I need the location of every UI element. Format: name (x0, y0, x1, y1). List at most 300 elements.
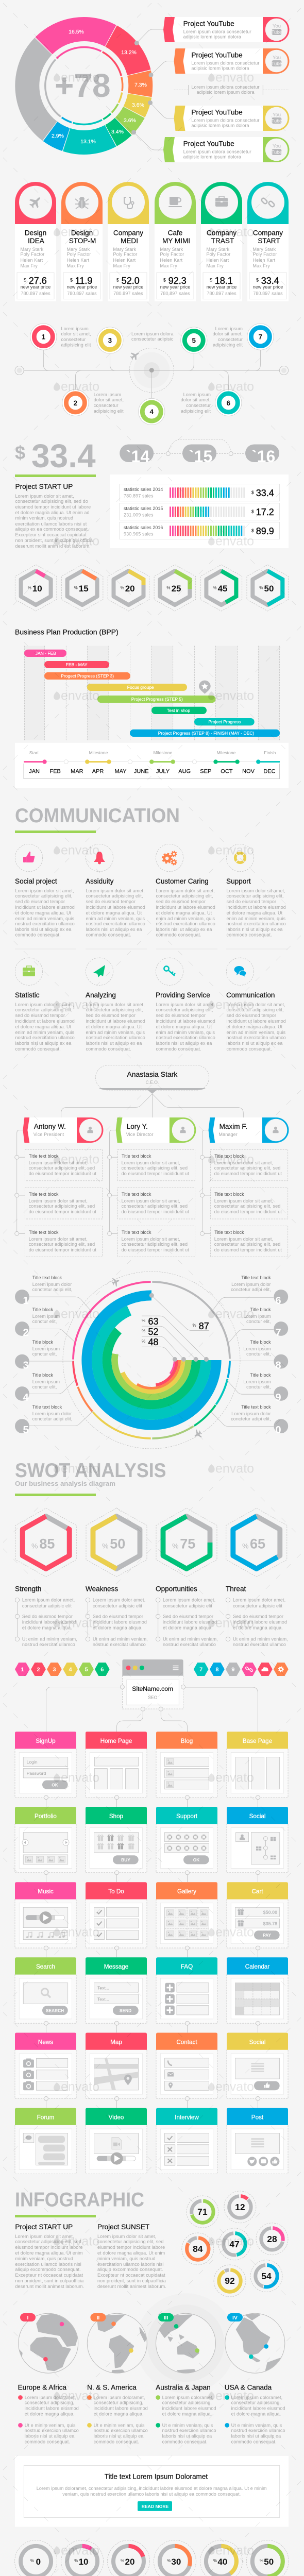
panel: To Do (86, 1882, 147, 1957)
feature: Statistic: consectetur adipisicing elit, (15, 1007, 73, 1012)
swot: Opportunities: et dolore magna aliqua. (163, 1625, 213, 1631)
globes row: IV (232, 2315, 238, 2321)
panel: months timeline: JAN (29, 768, 40, 774)
panel: Social (likes) (227, 2033, 288, 2108)
percent rings: % (121, 2558, 124, 2563)
panel: Music: Music (38, 1888, 54, 1895)
panel: months timeline: APR (92, 768, 104, 774)
region: Australia & Japan: et dolore magna aliqua. (162, 2412, 212, 2417)
feature: Providing Service: Providing Service (156, 991, 210, 999)
feature: Support: consectetur adipisicing elit, (227, 893, 284, 899)
feature: Statistic: Lorem ipsum dolor sit amet, (15, 1002, 74, 1007)
donut chart: +78 (55, 67, 111, 104)
radial bar chart (15, 1250, 288, 1470)
timeline with numbered nodes: Lorem ipsum (94, 392, 121, 397)
region: N. & S. America: et dolore magna aliqua. (94, 2412, 144, 2417)
panel: News (15, 2033, 76, 2108)
card: Project YouTube 1: Project YouTube (183, 20, 234, 28)
swot: Weakness: et dolore magna aliqua. (93, 1625, 143, 1631)
numbered hexagon badges: 3 (53, 1667, 56, 1673)
feature: Communication: Lorem ipsum dolor sit amet, (227, 1002, 285, 1007)
org column: Lory Y.: Lorem ipsum dolor sit amet, (122, 1198, 180, 1204)
price card: Design IDEA: $ (24, 277, 26, 282)
feature: Providing Service: et dolore magna aliqua. Ut (156, 1024, 212, 1029)
feature: Customer Caring: commodo consequat. (156, 933, 201, 938)
radial bar chart: Lorem ipsum (243, 1379, 271, 1384)
card: Project YouTube 3: You (273, 112, 281, 117)
small gauge cluster (182, 2191, 288, 2297)
feature: Social project: laboris nisi ut aliquip ex ea (15, 927, 72, 932)
price card: Design STOP-M: new year price (67, 284, 97, 290)
feature: Providing Service: commodo consequat. (156, 1046, 201, 1052)
radial bar chart: 2 (23, 1327, 29, 1338)
price card: Cafe MY MIMI (155, 182, 196, 301)
price card: Design STOP-M: STOP-M (69, 237, 96, 245)
gantt chart: Project Progress (STEP 8) - FINISH (MAY - DEC) (158, 731, 254, 736)
feature: Assiduity (86, 844, 147, 949)
feature: Assiduity: sed do eiusmod tempor (86, 899, 136, 904)
panel: FAQ (156, 1957, 217, 2032)
percent rings: 50 (264, 2557, 274, 2567)
radial bar chart: Title block (250, 1340, 271, 1345)
feature: Statistic: incididunt ut labore eiusmod (15, 1019, 75, 1024)
feature: Providing Service: incididunt ut labore eiusmod (156, 1019, 215, 1024)
region: Europe & Africa: Lorem ipsum doloramet, (25, 2395, 76, 2400)
panel: Cart: Cart (251, 1888, 263, 1895)
text: Project START UP: minim veniam, quis nostrud (15, 516, 73, 521)
org chart: CEO node (61, 1065, 243, 1117)
org column: Lory Y.: Title text block (122, 1192, 151, 1197)
radial bar chart: % (142, 1329, 145, 1333)
swot: Strength: Ut enim ad minim veniam, (22, 1636, 77, 1641)
feature: Analyzing: sed do eiusmod tempor (86, 1013, 136, 1018)
region: N. & S. America: Lorem ipsum doloramet, (94, 2395, 145, 2400)
region: USA & Canada: commodo consequat. (231, 2439, 277, 2445)
radial bar chart: Lorem ipsum dolor (32, 1411, 72, 1416)
big price heading: $ (15, 442, 25, 463)
price card: Company TRAST: new year price (207, 284, 237, 290)
card: Project YouTube 2: Lorem ipsum dolora consectetur (191, 61, 260, 66)
numbered hexagon badges: 7 (199, 1667, 202, 1673)
year pills: `15 (189, 447, 212, 466)
org column: Lory Y.: consectetur adipisicing elit, sed (122, 1204, 188, 1209)
panel: Forum: Forum (37, 2114, 54, 2121)
feature: Statistic (15, 958, 75, 1052)
year pills: `14 (126, 447, 149, 466)
text: Project START UP and Project SUNSET: non proident, sunt in culpaofficia (97, 2278, 166, 2283)
hexagon percent row: 20 (125, 584, 135, 594)
small gauge cluster: 84 (193, 2244, 203, 2254)
org column: Antony W.: Lorem ipsum dolor sit amet, (29, 1236, 88, 1242)
percent rings (15, 2540, 289, 2576)
feature: Assiduity: commodo consequat. (86, 933, 131, 938)
card: Project YouTube 2: adipisic lorem ipsum dolora (191, 66, 249, 71)
panel: Interview (156, 2108, 217, 2174)
panel: months timeline: FEB (49, 768, 61, 774)
hexagon percent row: 10 (32, 584, 42, 594)
org column: Maxim F.: Title text block (214, 1230, 244, 1235)
panel: Search: Search (36, 1963, 55, 1970)
percent rings: 20 (125, 2557, 134, 2567)
globes row: II (96, 2315, 99, 2321)
org column: Antony W. (15, 1117, 104, 1257)
card: Project YouTube 4: You (273, 143, 281, 149)
panel: Home Page (86, 1732, 147, 1807)
panel: Post: Post (251, 2114, 264, 2121)
panel: months timeline: MAY (114, 768, 127, 774)
panel: months timeline: Milestone (217, 750, 236, 755)
region: USA & Canada: incididunt labore eiusmod (231, 2406, 285, 2411)
panel: sales statistics: 930.965 sales (124, 532, 154, 537)
region: Australia & Japan: Lorem ipsum doloramet, (162, 2395, 213, 2400)
panel: Social (227, 1807, 288, 1882)
panel: SignUp: Password (27, 1771, 46, 1776)
price card: Design IDEA: Helen Kart (21, 258, 43, 263)
price card: Design IDEA: new year price (21, 284, 50, 290)
region: Australia & Japan: laboris nisi ut aliquip ea (162, 2434, 212, 2439)
timeline with numbered nodes: 1 (42, 333, 46, 341)
card: Project YouTube 3: adipisic lorem ipsum dolora (191, 123, 249, 128)
panel: SignUp (15, 1732, 76, 1807)
price card: Cafe MY MIMI: new year price (160, 284, 190, 290)
text: Project START UP and Project SUNSET: Excepteur nt occaecat cupidatat (15, 2273, 83, 2278)
org column: Lory Y. (108, 1117, 196, 1257)
panel: Portfolio: Portfolio (35, 1813, 57, 1820)
org column: Lory Y.: Title text block (122, 1154, 151, 1159)
text: Project START UP and Project SUNSET: exercitation ullamco laboris nisi (97, 2262, 164, 2267)
price card: Cafe MY MIMI: MY MIMI (162, 237, 190, 245)
timeline with numbered nodes: 3 (108, 337, 112, 344)
swot: Weakness: Weakness (86, 1585, 118, 1592)
price card: Company TRAST: Helen Kart (206, 258, 229, 263)
site map root: SiteName.com (46, 1659, 258, 1732)
feature: Social project: Lorem ipsum dolor sit amet, (15, 888, 74, 893)
org column: Lory Y.: Lory Y. (127, 1123, 148, 1130)
timeline with numbered nodes: Lorem ipsum dolora (131, 331, 174, 336)
feature: Assiduity: enim ad minim veniam, quis (86, 916, 145, 921)
timeline with numbered nodes: 7 (259, 333, 262, 341)
feature: Assiduity: Assiduity (86, 877, 114, 885)
numbered hexagon badges: 8 (215, 1667, 218, 1673)
feature: Providing Service: laboris nisi ut aliquip ex ea (156, 1041, 212, 1046)
panel: call to action: veniam, quis nostrud exerciion ullamco laboris nisi ut aliquip ea commodo consequat. (62, 2492, 241, 2497)
timeline with numbered nodes: consectetur (94, 403, 119, 408)
percent rings: % (167, 2558, 171, 2563)
numbered hexagon badges: 2 (37, 1667, 40, 1673)
note text between cards (174, 84, 289, 95)
radial bar chart: conctetur adipi elit, (231, 1287, 271, 1292)
panel: Contact: Contact (176, 2039, 197, 2045)
hexagon percent row: % (259, 585, 263, 590)
feature: Assiduity: laboris nisi ut aliquip ex ea (86, 927, 142, 932)
price card: Company TRAST: Max Fry (206, 263, 224, 268)
price card: Company TRAST: Poly Factor (206, 252, 230, 257)
region: N. & S. America (87, 2384, 148, 2445)
text: Project START UP: consectetur adipisicing elit, sed do (15, 499, 88, 504)
swot: Weakness: Sed do eiusmod tempor (93, 1614, 143, 1619)
panel: SignUp: SignUp (36, 1738, 56, 1744)
price card: Design IDEA: 27.6 (29, 276, 47, 286)
feature: Customer Caring: Customer Caring (156, 877, 209, 885)
region: Europe & Africa: Ut e minim veniam, quis (25, 2422, 76, 2428)
org column: Maxim F.: Lorem ipsum dolor sit amet, (214, 1236, 273, 1242)
price card: Company MEDI: MEDI (121, 237, 138, 245)
gantt chart (24, 646, 280, 740)
gantt chart: Project Progress (STEP 5) (131, 697, 183, 702)
text: Project START UP: Excepteur sint occaecat cupidatat (15, 532, 87, 537)
text: Project START UP: deserunt mollit anim id est laborum. (15, 544, 91, 549)
small gauge cluster: 28 (267, 2234, 277, 2244)
text: Project START UP and Project SUNSET: Excepteur nt occaecat cupidatat (97, 2273, 165, 2278)
price card: Cafe MY MIMI: $ (163, 277, 166, 282)
price card: Company MEDI: Company (113, 229, 143, 237)
price card: Company MEDI: $ (116, 277, 119, 282)
price card: Company MEDI: 52.0 (122, 276, 140, 286)
timeline with numbered nodes: dolor sit amet, (181, 397, 211, 402)
feature: Customer Caring: sed do eiusmod tempor (156, 899, 206, 904)
feature: Statistic: nostrud exercitation ullamco (15, 1035, 75, 1040)
panel: sales statistics: $ (251, 490, 254, 495)
feature: Social project: incididunt ut labore eiusmod (15, 905, 75, 910)
text: Project START UP and Project SUNSET: non proident, sunt in culpaofficia (15, 2278, 83, 2283)
price card: Design IDEA: 780.897 sales (21, 291, 50, 296)
feature: Statistic: laboris nisi ut aliquip ex ea (15, 1041, 72, 1046)
percent rings: % (213, 2558, 217, 2563)
price card: Design IDEA: Poly Factor (21, 252, 44, 257)
panel: sales statistics (110, 474, 289, 548)
note text between cards: adipisic lorem ipsum dolora (196, 90, 255, 95)
swot: Threat: Threat (226, 1585, 246, 1592)
card: Project YouTube 3: Lorem ipsum dolora consectetur (191, 117, 260, 123)
timeline with numbered nodes: consectetur (61, 337, 86, 342)
swot: Strength: % (31, 1542, 38, 1550)
swot: Opportunities: nostrud exercitat ullamco (163, 1642, 216, 1647)
feature: Providing Service: consectetur adipisicing elit, (156, 1007, 213, 1012)
feature: Social project: sed do eiusmod tempor (15, 899, 65, 904)
panel: months timeline: NOV (242, 768, 255, 774)
price card: Company MEDI (108, 182, 149, 301)
price card: Company START: Max Fry (252, 263, 270, 268)
panel: sales statistics: 231.009 sales (124, 513, 154, 518)
panel: Video (86, 2108, 147, 2174)
text: Project START UP and Project SUNSET: minim veniam, quis nostrud (15, 2256, 73, 2261)
card: Project YouTube 1: Lorem ipsum dolora consectetur (183, 29, 251, 34)
feature: Analyzing: commodo consequat. (86, 1046, 131, 1052)
panel: months timeline: Milestone (89, 750, 108, 755)
radial bar chart: 52 (148, 1327, 159, 1337)
percent rings: 10 (79, 2557, 89, 2567)
feature: Assiduity: et dolore magna aliqua. Ut (86, 910, 142, 916)
card: Project YouTube 1: Tube (272, 30, 282, 35)
site map root: SiteName.com: SEO (148, 1695, 158, 1700)
swot: Weakness: incididunt labore eiusmod (93, 1620, 147, 1625)
hexagon percent row: 50 (264, 584, 274, 594)
org column: Lory Y.: Lorem ipsum dolor sit amet, (122, 1236, 180, 1242)
panel: months timeline: DEC (263, 768, 276, 774)
panel: Map: Map (110, 2039, 122, 2045)
price card: Cafe MY MIMI: 780.897 sales (160, 291, 190, 296)
feature: Support: laboris nisi ut aliquip ex ea (227, 927, 283, 932)
heading: COMMUNICATION: COMMUNICATION (15, 805, 180, 827)
panel: Home Page: Home Page (100, 1738, 132, 1744)
panel: Support: OK (193, 1857, 199, 1862)
price card: Company START: Poly Factor (252, 252, 277, 257)
card: Project YouTube 4 (163, 137, 290, 162)
text: Project START UP and Project SUNSET: Project START UP (15, 2223, 73, 2231)
panel: Message: Text... (97, 1985, 109, 1990)
feature: Analyzing (86, 958, 145, 1052)
radial bar chart: Title text block (32, 1275, 62, 1280)
swot: Threat: nostrud exercitat ullamco (233, 1642, 286, 1647)
panel: sales statistics: $ (251, 509, 254, 514)
price card: Design IDEA: Mary Stark (21, 247, 44, 252)
radial bar chart: 9 (275, 1392, 281, 1403)
timeline with numbered nodes: dolor sit amet, (213, 331, 243, 336)
swot: Weakness (86, 1508, 148, 1647)
timeline with numbered nodes: adipisicing elit (61, 343, 91, 348)
globes row (18, 2305, 285, 2382)
text: Project START UP: Project START UP (15, 483, 73, 490)
region: Europe & Africa: consectetur adipisicing, (25, 2400, 74, 2405)
price card: Company START (247, 182, 289, 301)
card: Project YouTube 2: Project YouTube (191, 51, 243, 59)
text: Project START UP: aliquip ex ea commodo consequat. (15, 527, 89, 532)
price card: Design IDEA (15, 182, 56, 301)
card: Project YouTube 3 (174, 106, 290, 131)
radial bar chart: conctur elit, (32, 1351, 57, 1357)
swot: Threat: 65 (250, 1536, 265, 1552)
org column: Maxim F.: Lorem ipsum dolor sit amet, (214, 1198, 273, 1204)
panel: Social: Social (249, 1813, 265, 1820)
radial bar chart: Lorem ipsum (243, 1346, 271, 1351)
swot: Threat (226, 1508, 288, 1647)
org column: Antony W.: do eiusmod tempor incididunt ut (29, 1171, 96, 1176)
price card: Design IDEA: Max Fry (21, 263, 38, 268)
org column: Maxim F.: Maxim F. (219, 1123, 247, 1130)
text: Project START UP and Project SUNSET: exercitation ullamco laboris nisi (15, 2262, 81, 2267)
feature: Providing Service (156, 958, 215, 1052)
feature: Providing Service: nostrud exercitation ullamco (156, 1035, 215, 1040)
org chart: CEO node: Anastasia Stark (127, 1070, 178, 1078)
price card: Company TRAST: Mary Stark (206, 247, 230, 252)
price card: Company MEDI: 780.897 sales (113, 291, 143, 296)
swot: Opportunities (156, 1508, 218, 1647)
feature: Communication: laboris nisi ut aliquip ex ea (227, 1041, 283, 1046)
radial bar chart: Lorem ipsum (32, 1379, 60, 1384)
feature: Analyzing: Lorem ipsum dolor sit amet, (86, 1002, 145, 1007)
timeline with numbered nodes: 4 (150, 408, 154, 416)
card: Project YouTube 1: adipisic lorem ipsum dolora (183, 34, 241, 39)
panel: Search (15, 1957, 76, 2032)
swot: Weakness: consectetur adipisic elit (93, 1603, 142, 1608)
panel: months timeline: SEP (200, 768, 211, 774)
panel: Shop (86, 1807, 147, 1882)
panel: Portfolio (15, 1807, 76, 1882)
org column: Antony W.: Antony W. (34, 1123, 66, 1130)
radial bar chart: 87 (199, 1321, 209, 1331)
feature: Social project: commodo consequat. (15, 933, 61, 938)
gantt chart title: Business Plan Production (BPP) (15, 628, 119, 636)
panel: Cart: $35.78 (263, 1921, 277, 1926)
region: Australia & Japan: Australia & Japan (156, 2384, 211, 2392)
price card: Cafe MY MIMI: Mary Stark (160, 247, 183, 252)
card: Project YouTube 2: You (273, 55, 281, 61)
panel: call to action: READ MORE (142, 2504, 169, 2509)
region: N. & S. America: laboris nisi ut aliquip ea (94, 2434, 143, 2439)
swot: Threat: % (242, 1542, 248, 1550)
radial bar chart: Lorem ipsum (32, 1314, 60, 1319)
donut chart: 13.2% (121, 49, 137, 56)
panel: months timeline: AUG (178, 768, 191, 774)
panel: To Do: To Do (108, 1888, 124, 1895)
region: Europe & Africa: Europe & Africa (18, 2384, 66, 2392)
swot: Opportunities: consectetur adipisic elit (163, 1603, 212, 1608)
region: N. & S. America: consectetur adipisicing, (94, 2400, 143, 2405)
org column: Antony W.: Vice President (33, 1132, 64, 1137)
text: Project START UP: eiusmod tempor incididunt ut labore (15, 504, 91, 510)
panel: SignUp: OK (52, 1783, 58, 1788)
org column: Antony W.: consectetur adipisicing elit, sed (29, 1165, 95, 1171)
org column: Maxim F.: Title text block (214, 1192, 244, 1197)
gantt chart: Project Progress (208, 719, 241, 724)
feature: Customer Caring: Lorem ipsum dolor sit amet, (156, 888, 215, 893)
panel: Cart: $50.00 (263, 1910, 277, 1915)
swot: Strength: Sed do eiusmod tempor (22, 1614, 73, 1619)
region: USA & Canada: USA & Canada (225, 2384, 272, 2392)
region: Europe & Africa: incididunt labore eiusmod (25, 2406, 79, 2411)
text: Project START UP and Project SUNSET: Lorem ipsum dolor sit amet, (15, 2234, 74, 2239)
panel: Shop: Shop (109, 1813, 124, 1820)
org column: Antony W.: do eiusmod tempor incididunt ut (29, 1247, 96, 1252)
feature: Customer Caring: incididunt ut labore eiusmod (156, 905, 215, 910)
panel: Cart: PAY (263, 1933, 271, 1938)
panel: News: News (38, 2039, 53, 2045)
panel: months timeline: JULY (156, 768, 170, 774)
big price heading: 33.4 (31, 437, 96, 474)
feature: Support: nostrud exercitation ullamco (227, 921, 286, 926)
text: Project START UP: non proident, sunt in culpa qui officia (15, 538, 93, 543)
swot: Weakness: Ut enim ad minim veniam, (93, 1636, 148, 1641)
panel: sales statistics: statistic sales 2015 (124, 506, 163, 511)
percent rings: 0 (36, 2557, 41, 2567)
feature: Communication: enim ad minim veniam, quis (227, 1030, 286, 1035)
radial bar chart: 4 (23, 1392, 29, 1403)
panel: Social (likes): Social (249, 2039, 265, 2045)
text: Project START UP: et dolore magna aliqua. Ut enim ad (15, 510, 90, 515)
percent rings: % (30, 2558, 34, 2563)
feature: Support: incididunt ut labore eiusmod (227, 905, 286, 910)
feature: Social project: Social project (15, 877, 57, 885)
org column: Antony W.: consectetur adipisicing elit, sed (29, 1204, 95, 1209)
text: Project START UP and Project SUNSET: et dolore magna aliqua. Ut enim (97, 2250, 165, 2256)
percent rings: % (74, 2558, 78, 2563)
price card: Company START: 780.897 sales (253, 291, 283, 296)
heading: SWOT ANALYSIS: SWOT ANALYSIS (15, 1460, 166, 1482)
panel: Support: Support (176, 1813, 198, 1820)
timeline with numbered nodes: 2 (74, 399, 77, 407)
heading: INFOGRAPHIC: INFOGRAPHIC (15, 2189, 144, 2211)
hexagon percent row: % (74, 585, 78, 590)
org column: Antony W.: do eiusmod tempor incididunt ut (29, 1209, 96, 1214)
swot: Threat: consectetur adipisic elit (233, 1603, 282, 1608)
donut chart (4, 6, 164, 166)
numbered hexagon badges (15, 1663, 289, 1676)
text: Project START UP and Project SUNSET: minim veniam, quis nostrud (97, 2256, 156, 2261)
org column: Lory Y.: Lorem ipsum dolor sit amet, (122, 1160, 180, 1165)
panel: sales statistics: 780.897 sales (124, 494, 154, 499)
radial bar chart: % (142, 1318, 145, 1323)
feature: Analyzing: Analyzing (86, 991, 116, 999)
